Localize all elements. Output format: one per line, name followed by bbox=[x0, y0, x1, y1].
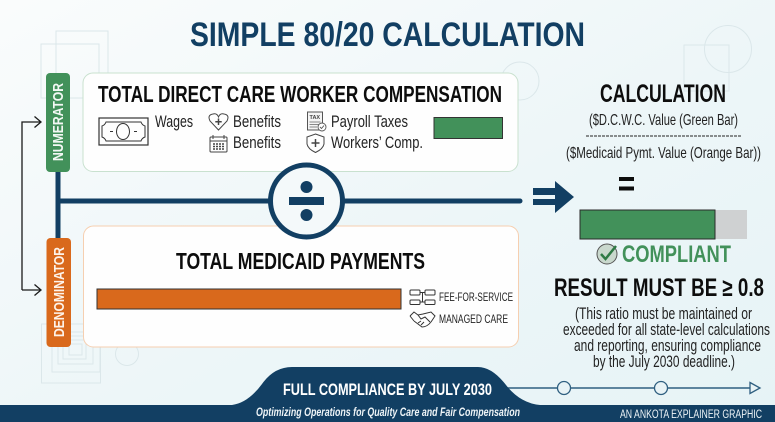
benefits label: Benefits bbox=[233, 134, 281, 152]
title: SIMPLE 80/20 CALCULATION bbox=[190, 16, 585, 54]
numerator label: NUMERATOR bbox=[50, 83, 67, 161]
wages label: Wages bbox=[155, 113, 193, 131]
icon: heart bbox=[209, 114, 228, 130]
icon: flow chart bbox=[410, 290, 435, 304]
icon: calendar bbox=[210, 135, 227, 152]
timeline bbox=[505, 382, 760, 394]
icon: division symbol bbox=[270, 165, 342, 237]
panel heading: TOTAL MEDICAID PAYMENTS bbox=[176, 248, 425, 274]
explanation text bbox=[563, 305, 770, 371]
icon: shield bbox=[307, 134, 324, 152]
arrow: double arrow to result bbox=[533, 181, 574, 213]
equals sign bbox=[619, 177, 634, 190]
panel: total direct care worker compensation bbox=[83, 73, 518, 172]
payroll taxes label: Payroll Taxes bbox=[331, 113, 408, 131]
orange value bar bbox=[97, 289, 401, 309]
deadline heading: FULL COMPLIANCE BY JULY 2030 bbox=[283, 380, 492, 399]
connector lines bbox=[58, 170, 520, 240]
panel heading: TOTAL DIRECT CARE WORKER COMPENSATION bbox=[98, 81, 502, 107]
icon: tax form bbox=[308, 112, 326, 131]
fee-for-service label: FEE-FOR-SERVICE bbox=[439, 290, 513, 304]
compliance ratio bar bbox=[580, 210, 747, 239]
calculation heading: CALCULATION bbox=[600, 80, 726, 108]
workers comp label: Workers’ Comp. bbox=[331, 134, 423, 152]
compliant label: COMPLIANT bbox=[622, 241, 731, 268]
icon: compliant check bbox=[597, 244, 617, 264]
numerator label bbox=[46, 73, 70, 172]
denominator label bbox=[46, 238, 71, 347]
icon: banknote bbox=[99, 118, 148, 145]
managed care label: MANAGED CARE bbox=[439, 312, 508, 326]
tagline: Optimizing Operations for Quality Care and Fair Compensation bbox=[256, 405, 520, 419]
icon: tax form: TAX bbox=[310, 115, 320, 121]
benefits label: Benefits bbox=[233, 113, 281, 131]
panel: calculation bbox=[554, 80, 770, 371]
green value bar bbox=[434, 118, 502, 138]
panel: total medicaid payments bbox=[84, 226, 518, 347]
icon: handshake bbox=[410, 312, 435, 327]
bracket arrow linking numerator and denominator bbox=[22, 116, 41, 296]
footer banner bbox=[0, 367, 775, 422]
denominator label: DENOMINATOR bbox=[51, 247, 68, 337]
